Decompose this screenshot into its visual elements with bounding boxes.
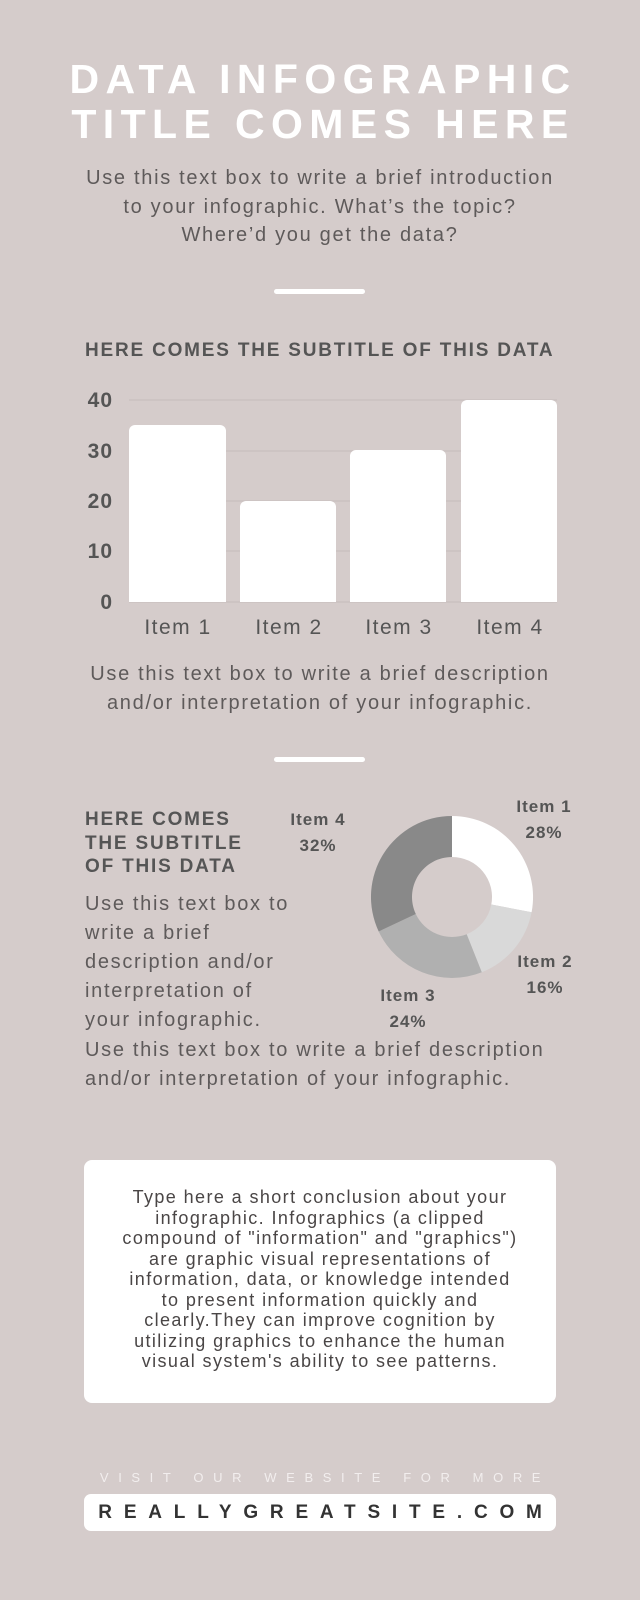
url box: REALLYGREATSITE.COM — [98, 1502, 554, 1523]
conclusion box: infographic. Infographics (a clipped — [155, 1208, 485, 1228]
left description: description and/or — [85, 951, 275, 973]
intro text: to your infographic. What’s the topic? — [123, 196, 517, 218]
label item 3 — [380, 986, 436, 1031]
conclusion box: visual system's ability to see patterns. — [142, 1351, 498, 1371]
intro text — [86, 167, 554, 246]
label item 3: 24% — [389, 1012, 427, 1031]
conclusion box: Type here a short conclusion about your — [133, 1187, 507, 1207]
bar chart: 0 — [100, 591, 113, 614]
bar chart: 10 — [88, 540, 113, 563]
conclusion box: are graphic visual representations of — [149, 1248, 491, 1268]
title: TITLE COMES HERE — [71, 101, 575, 147]
bar chart: Item 2 — [255, 616, 323, 639]
label item 1 — [516, 797, 572, 842]
label item 2 — [517, 952, 573, 997]
subtitle 1: HERE COMES THE SUBTITLE OF THIS DATA — [85, 340, 554, 361]
subtitle 2: THE SUBTITLE — [85, 832, 243, 854]
description 2: Use this text box to write a brief description — [85, 1039, 544, 1061]
intro text: Use this text box to write a brief introduction — [86, 167, 554, 189]
bar chart — [88, 389, 557, 639]
title — [69, 56, 577, 147]
label item 1: 28% — [525, 823, 563, 842]
url box — [84, 1494, 556, 1531]
bar chart: Item 1 — [144, 616, 212, 639]
conclusion box: utilizing graphics to enhance the human — [134, 1330, 506, 1350]
left description: interpretation of — [85, 980, 253, 1002]
label item 4: Item 4 — [290, 810, 346, 829]
conclusion box — [84, 1160, 556, 1403]
description 2: and/or interpretation of your infographic. — [85, 1068, 511, 1090]
label item 2: Item 2 — [517, 952, 573, 971]
left description: your infographic. — [85, 1009, 262, 1031]
title: DATA INFOGRAPHIC — [69, 56, 577, 102]
description 1: and/or interpretation of your infographic. — [107, 692, 533, 714]
left description — [85, 893, 289, 1031]
label item 3: Item 3 — [380, 986, 436, 1005]
conclusion box: information, data, or knowledge intended — [129, 1269, 511, 1289]
left description: Use this text box to — [85, 893, 289, 915]
bar chart: 20 — [88, 490, 113, 513]
visit website text: VISIT OUR WEBSITE FOR MORE — [100, 1470, 550, 1485]
bar chart: Item 3 — [365, 616, 433, 639]
label item 2: 16% — [526, 978, 564, 997]
conclusion box: clearly.They can improve cognition by — [144, 1310, 496, 1330]
bar chart: 30 — [88, 440, 113, 463]
intro text: Where’d you get the data? — [181, 224, 459, 246]
subtitle 2: HERE COMES — [85, 809, 231, 830]
bar chart: 40 — [88, 389, 113, 412]
conclusion box: compound of "information" and "graphics") — [122, 1228, 518, 1248]
description 1: Use this text box to write a brief description — [90, 663, 550, 685]
donut chart — [371, 816, 533, 978]
bar chart: Item 4 — [476, 616, 544, 639]
subtitle 2: OF THIS DATA — [85, 856, 237, 877]
subtitle 2 — [85, 809, 243, 877]
conclusion box: to present information quickly and — [162, 1290, 478, 1310]
label item 1: Item 1 — [516, 797, 572, 816]
description 1 — [90, 663, 550, 714]
description 2 — [85, 1039, 544, 1090]
label item 4 — [290, 810, 346, 855]
left description: write a brief — [85, 922, 210, 944]
label item 4: 32% — [299, 836, 337, 855]
